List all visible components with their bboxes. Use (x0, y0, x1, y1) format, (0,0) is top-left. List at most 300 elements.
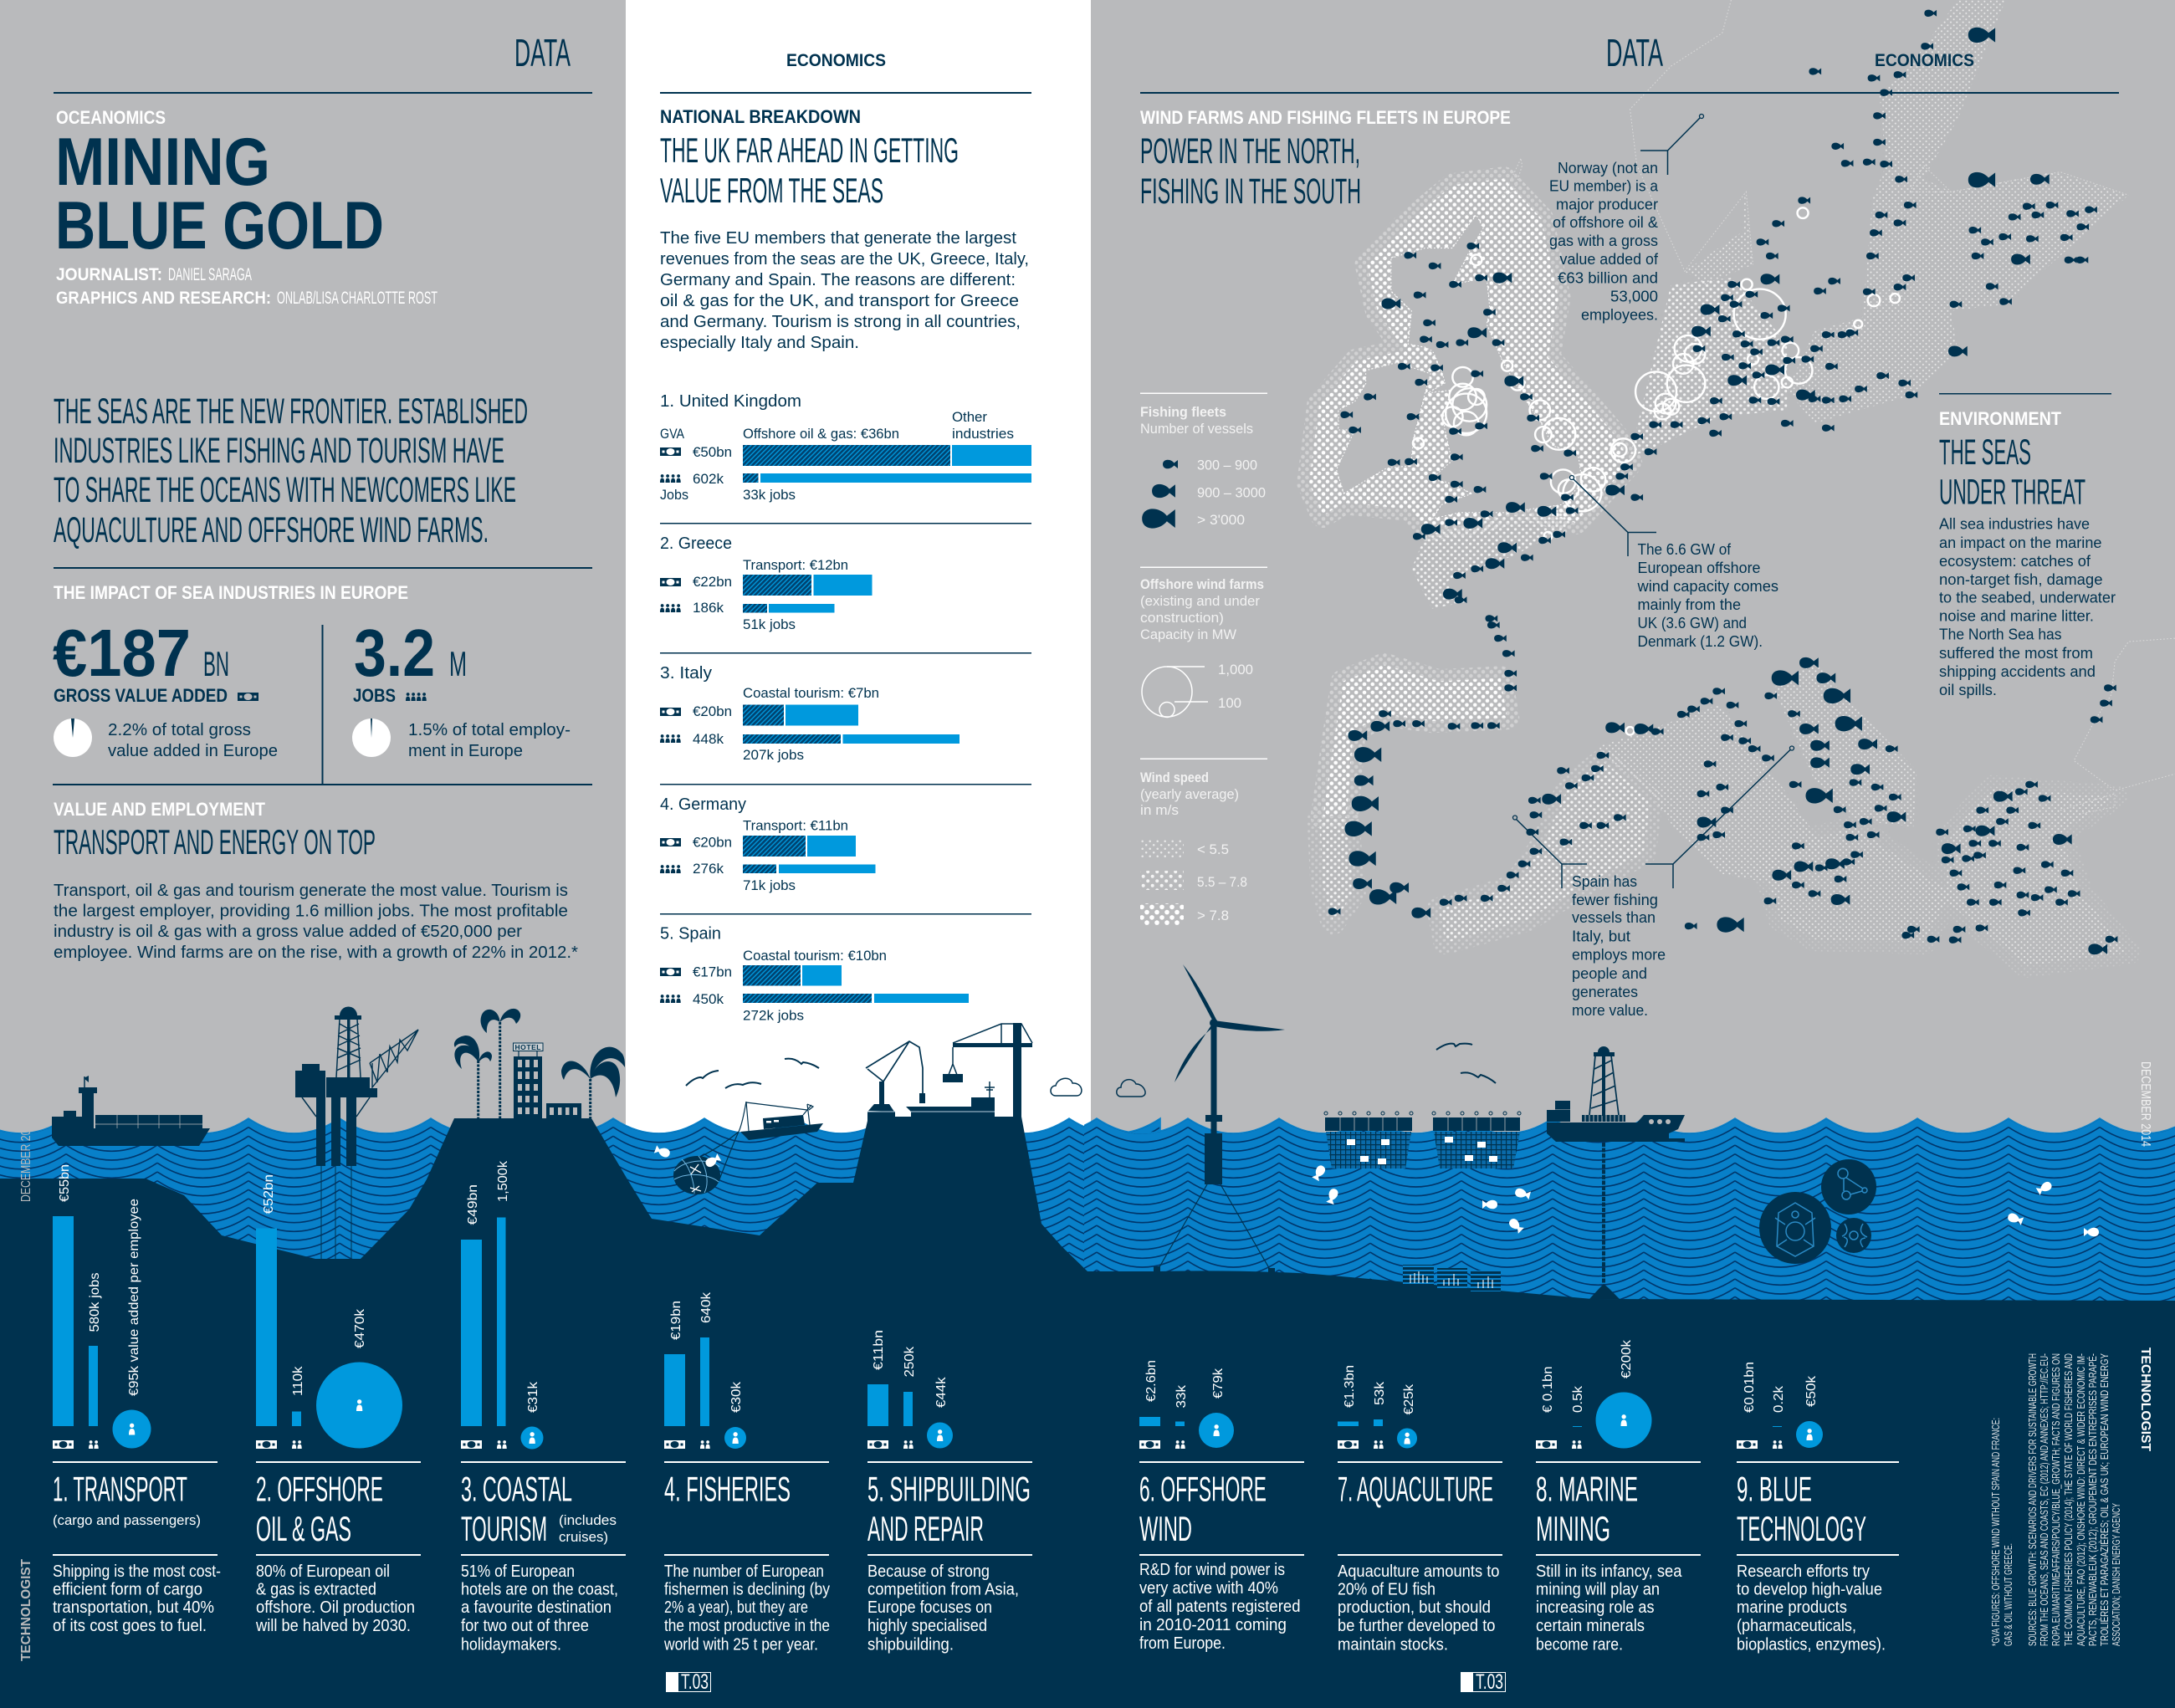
chart: Greece: 51k jobs (743, 616, 796, 632)
icon: seabed kelp boxes (1403, 1265, 1501, 1291)
text: offshore wind: in 2010-2011 coming (1139, 1616, 1287, 1634)
industry column 1: transport: (cargo and passengers) (53, 1512, 201, 1528)
industry column 7: aquaculture (1338, 1365, 1506, 1694)
legend: fishing fleets: 300 – 900 (1197, 458, 1257, 473)
intro body (660, 229, 1029, 352)
text: offshore wind (1139, 1561, 1300, 1653)
text: coastal tourism: a favourite destination (461, 1598, 612, 1617)
panel: right map text (1140, 31, 2119, 1019)
legend: wind speed: > 7.8 (1197, 908, 1229, 923)
panel: left intro column (53, 31, 592, 962)
chart: marine mining: € 0.1bn (1541, 1367, 1555, 1413)
chart: fisheries: €19bn (669, 1301, 683, 1340)
chart: marine mining: €200k (1620, 1339, 1634, 1378)
callout: Norway: Norway (not an (1558, 160, 1658, 176)
text: aquaculture: be further developed to (1338, 1617, 1496, 1635)
icon: shipyard crane (866, 1023, 1032, 1117)
icon: offshore wind turbine (1154, 964, 1285, 1275)
panel: environment: suffered the most from (1939, 645, 2093, 662)
legend: offshore wind farms (1140, 567, 1267, 718)
chart: blue technology: €50k (1804, 1375, 1819, 1407)
title: BLUE GOLD (55, 188, 384, 263)
chart: Greece: 2. Greece (660, 534, 732, 553)
text: shipbuilding: shipbuilding. (867, 1636, 954, 1654)
intro text: TO SHARE THE OCEANS WITH NEWCOMERS LIKE (54, 470, 516, 510)
text: offshore oil and gas: & gas is extracted (256, 1581, 376, 1599)
title: marine mining: MINING (1536, 1509, 1610, 1548)
chart: United Kingdom: 33k jobs (743, 487, 796, 503)
icon: birds over fishing boat (686, 1059, 819, 1088)
title: coastal tourism (461, 1469, 617, 1548)
chart: transport: €55bn (58, 1164, 72, 1202)
white centre panel (626, 0, 1091, 1154)
text: aquaculture: Aquaculture amounts to (1338, 1562, 1499, 1581)
text: offshore wind: from Europe. (1139, 1634, 1226, 1653)
chart: offshore oil and gas: 110k (291, 1365, 305, 1396)
callout: 6.6 GW: European offshore (1638, 560, 1760, 576)
heading: impact: THE IMPACT OF SEA INDUSTRIES IN EUROPE (54, 582, 408, 603)
icon: birds over fish farm (1436, 1044, 1496, 1083)
icon: blue technology cells (1759, 1159, 1876, 1264)
legend: offshore wind farms: Offshore wind farms (1140, 577, 1264, 592)
legend: offshore wind farms: (existing and under (1140, 594, 1261, 609)
page tag: T.03 (681, 1670, 709, 1694)
section label: data: DATA (1606, 31, 1663, 74)
text: shipbuilding: highly specialised (867, 1617, 987, 1635)
intro body: revenues from the seas are the UK, Greece, Italy, (660, 250, 1029, 268)
text: coastal tourism (461, 1562, 618, 1654)
panel: environment: shipping accidents and (1939, 663, 2096, 680)
country borders (1504, 0, 2175, 814)
chart: Spain: 272k jobs (743, 1007, 804, 1024)
text: shipbuilding: Europe focuses on (867, 1598, 992, 1617)
text: blue technology: Research efforts try (1737, 1562, 1870, 1581)
callout: Norway: gas with a gross (1549, 233, 1658, 249)
callout: Norway: €63 billion and (1558, 269, 1658, 286)
title: blue technology: 9. BLUE (1737, 1469, 1812, 1509)
body text: the largest employer, providing 1.6 million jobs. The most profitable (54, 902, 568, 920)
chart: offshore wind: €2.6bn (1144, 1360, 1159, 1402)
callout: Spain (1512, 746, 1794, 1019)
callout: Spain: people and (1572, 965, 1647, 982)
callout: Norway: EU member) is a (1549, 177, 1659, 194)
panel: environment: The North Sea has (1939, 626, 2061, 642)
chart: marine mining: 0.5k (1571, 1385, 1585, 1413)
panel: environment: ENVIRONMENT (1939, 408, 2062, 429)
legend: fishing fleets: 900 – 3000 (1197, 485, 1266, 500)
title: coastal tourism: (includes (559, 1512, 617, 1528)
chart: blue technology (1737, 1362, 1823, 1449)
callout: 6.6 GW: The 6.6 GW of (1638, 541, 1732, 558)
callout: Norway (1549, 114, 1703, 323)
side text: Technologist left: TECHNOLOGIST (19, 1559, 33, 1661)
industry column 1: transport (53, 1164, 221, 1635)
industry column 8: marine mining (1536, 1339, 1701, 1654)
legend: fishing fleets: > 3'000 (1197, 513, 1245, 528)
text: fisheries: the most productive in the (664, 1617, 830, 1635)
chart: aquaculture: 53k (1373, 1381, 1387, 1405)
text: fisheries: 2% a year), but they are (664, 1598, 808, 1617)
headline (660, 130, 959, 210)
chart: offshore oil and gas: €52bn (262, 1174, 276, 1215)
section label: economics: ECONOMICS (786, 51, 886, 70)
chart: Spain: Coastal tourism: €10bn (743, 948, 887, 964)
chart: Germany: 71k jobs (743, 877, 796, 893)
side text: Technologist right: TECHNOLOGIST (2138, 1347, 2152, 1451)
page tag (666, 1670, 711, 1694)
panel: environment: All sea industries have (1939, 515, 2090, 532)
title: aquaculture: 7. AQUACULTURE (1338, 1469, 1493, 1509)
chart: Germany (660, 795, 875, 893)
callout: 6.6 GW (1569, 475, 1778, 650)
chart: Germany: €20bn (693, 835, 732, 850)
icon: hotel and palms (454, 1009, 625, 1118)
intro text: THE SEAS ARE THE NEW FRONTIER. ESTABLISHED (54, 391, 528, 432)
chart: Greece: Transport: €12bn (743, 557, 848, 573)
industry column 4: fisheries (663, 1291, 830, 1694)
text: transport: of its cost goes to fuel. (53, 1617, 207, 1635)
industry column 6: offshore wind (1139, 1360, 1304, 1653)
headline: power in the north: FISHING IN THE SOUTH (1140, 171, 1361, 212)
chart: offshore oil and gas: €470k (353, 1308, 367, 1348)
stat: jobs: 3.2 (354, 616, 435, 690)
legend: fishing fleets (1140, 393, 1267, 529)
offshore wind farm circles (1413, 207, 1900, 735)
icon: hotel and palms: HOTEL (515, 1043, 540, 1051)
chart: aquaculture (1338, 1365, 1417, 1449)
title: coastal tourism: 3. COASTAL (461, 1469, 572, 1509)
legend: fishing fleets: Fishing fleets (1140, 405, 1226, 420)
chart: transport: €95k value added per employee (127, 1199, 141, 1396)
intro body: Germany and Spain. The reasons are different: (660, 271, 1016, 289)
text: fisheries: fishermen is declining (by (664, 1581, 830, 1599)
text: aquaculture: production, but should (1338, 1598, 1491, 1617)
intro text (54, 391, 528, 550)
icon: fish farm cages (1324, 1112, 1521, 1168)
credits (56, 265, 438, 308)
chart: United Kingdom: Offshore oil & gas: €36bn (743, 426, 899, 442)
panel: environment: THE SEAS (1939, 432, 2031, 473)
chart: offshore wind: 33k (1174, 1384, 1189, 1409)
title: transport: 1. TRANSPORT (53, 1469, 187, 1509)
footnotes and sources: ASSOCIATION; DANISH ENERGY AGENCY (2110, 1503, 2122, 1646)
text: transport: Shipping is the most cost- (53, 1562, 221, 1581)
chart: Italy: 3. Italy (660, 664, 712, 683)
chart: United Kingdom: industries (952, 426, 1014, 442)
text: offshore oil and gas: offshore. Oil production (256, 1598, 415, 1617)
title: offshore wind: 6. OFFSHORE (1139, 1469, 1267, 1509)
chart: United Kingdom: Jobs (660, 487, 688, 503)
intro body: The five EU members that generate the largest (660, 229, 1016, 248)
chart: Spain: 450k (693, 991, 724, 1007)
title: MINING (55, 125, 270, 200)
title: fisheries: 4. FISHERIES (664, 1469, 791, 1509)
title: shipbuilding: AND REPAIR (867, 1509, 984, 1548)
legend: wind speed (1140, 758, 1267, 925)
chart: Italy: €20bn (693, 703, 732, 719)
callout: Norway: employees. (1581, 306, 1658, 323)
text: fisheries: world with 25 t per year. (663, 1636, 818, 1654)
chart: Greece (660, 534, 872, 632)
text: shipbuilding: Because of strong (867, 1562, 990, 1581)
chart: United Kingdom (660, 392, 1031, 503)
chart: shipbuilding (867, 1330, 953, 1449)
kicker: oceanomics: OCEANOMICS (56, 107, 166, 128)
stat: jobs: M (449, 644, 467, 683)
callout: Spain: more value. (1572, 1002, 1648, 1019)
footnotes and sources: FROM THE OCEANS, SEAS AND COASTS, EC (2012) AND ANNEXES; HTTP://EC.EU- (2038, 1353, 2050, 1646)
text: fisheries (663, 1562, 830, 1654)
text: aquaculture: maintain stocks. (1338, 1636, 1448, 1654)
text: transport (53, 1562, 221, 1635)
chart: Germany: 4. Germany (660, 795, 746, 814)
callout: 6.6 GW: wind capacity comes (1636, 578, 1778, 595)
legend: offshore wind farms: 100 (1218, 696, 1241, 711)
footnotes and sources: ROPA.EU/MARITIMEAFFAIRS/POLICY/BLUE_GROWTH; FACTS AND FIGURES ON (2050, 1353, 2062, 1646)
panel: environment: noise and marine litter. (1939, 607, 2094, 624)
chart: coastal tourism: €49bn (466, 1184, 480, 1225)
panel: environment: non-target fish, damage (1939, 571, 2103, 588)
callout: Spain: Spain has (1572, 873, 1637, 890)
subheading: transport and energy: TRANSPORT AND ENERGY ON TOP (54, 822, 376, 862)
text: marine mining: increasing role as (1536, 1598, 1655, 1617)
footnotes and sources: SOURCES: BLUE GROWTH: SCENARIOS AND DRIVERS FOR SUSTAINABLE GROWTH (2026, 1353, 2039, 1646)
legend: wind speed: in m/s (1140, 803, 1179, 818)
headline: power in the north (1140, 131, 1361, 212)
chart: Italy: 207k jobs (743, 747, 804, 763)
sea with waves (0, 1117, 2175, 1301)
intro body: especially Italy and Spain. (660, 334, 859, 352)
stat: jobs: 1.5% of total employ- (408, 721, 571, 739)
text: coastal tourism: holidaymakers. (461, 1636, 561, 1654)
chart: fisheries (664, 1291, 746, 1449)
legend: wind speed: Wind speed (1140, 770, 1209, 785)
title: offshore wind (1139, 1469, 1267, 1548)
chart: Italy: 448k (693, 731, 724, 747)
panel: environment: an impact on the marine (1939, 534, 2101, 551)
section label: economics: ECONOMICS (1875, 51, 1974, 70)
footnotes and sources: PACTS, RENEWABLEUK (2012); GROUPEMENT DES ENTREPRISES PARAPÉ- (2086, 1353, 2099, 1646)
icon: fishing boat and net (673, 1102, 823, 1194)
chart: blue technology: €0.01bn (1743, 1362, 1757, 1413)
icon: white fish in sea (654, 1145, 2099, 1236)
industry column 2: offshore oil and gas (255, 1174, 421, 1635)
legend: wind speed: < 5.5 (1197, 842, 1229, 857)
text: fisheries: The number of European (664, 1562, 824, 1581)
callout: Spain: generates (1572, 984, 1638, 1000)
credits: GRAPHICS AND RESEARCH: (56, 289, 271, 308)
panel: environment: ecosystem: catches of (1939, 553, 2091, 570)
chart: United Kingdom: €50bn (693, 444, 732, 460)
text: aquaculture (1338, 1562, 1499, 1654)
side text: December 2014 right: DECEMBER 2014 (2138, 1061, 2152, 1147)
text: transport: transportation, but 40% (53, 1598, 214, 1617)
icon: container ship (52, 1076, 210, 1146)
chart: aquaculture: €1.3bn (1343, 1365, 1357, 1408)
footnotes and sources (1989, 1353, 2122, 1646)
credits: ONLAB/LISA CHARLOTTE ROST (277, 289, 438, 308)
title: offshore wind: WIND (1139, 1509, 1192, 1548)
text: marine mining (1536, 1562, 1682, 1654)
chart: United Kingdom: GVA (660, 426, 685, 442)
side text: December 2014 left: DECEMBER 2014 (19, 1118, 33, 1202)
chart: United Kingdom: Other (952, 409, 987, 425)
title: coastal tourism: TOURISM (461, 1509, 547, 1548)
title: blue technology: TECHNOLOGY (1737, 1509, 1866, 1548)
legend: offshore wind farms: 1,000 (1218, 662, 1253, 678)
stat: jobs: JOBS (353, 685, 396, 706)
legend: offshore wind farms: construction) (1140, 611, 1224, 626)
legend: fishing fleets: Number of vessels (1140, 422, 1253, 437)
text: offshore wind: R&D for wind power is (1139, 1561, 1285, 1579)
land: Britain and Ireland (1337, 215, 1582, 519)
text: coastal tourism: 51% of European (461, 1562, 575, 1581)
body text: industry is oil & gas with a gross value added of €520,000 per (54, 923, 522, 941)
stat: jobs (352, 616, 571, 760)
footnotes and sources: AQUACULTURE, FAO (2012); ONSHORE WIND: DIRECT & WIDER ECONOMIC IM- (2075, 1353, 2087, 1646)
panel: environment: oil spills. (1939, 682, 1997, 698)
headline: VALUE FROM THE SEAS (660, 171, 883, 210)
text: blue technology (1737, 1562, 1886, 1654)
callout: Norway: major producer (1556, 196, 1658, 212)
stat: gross value added: €187 (53, 616, 191, 690)
title: marine mining (1536, 1469, 1638, 1548)
stat: gross value added (53, 616, 278, 760)
chart: coastal tourism (461, 1160, 544, 1449)
chart: aquaculture: €25k (1402, 1383, 1416, 1415)
title: offshore oil and gas: 2. OFFSHORE (256, 1469, 383, 1509)
text: blue technology: bioplastics, enzymes). (1737, 1636, 1886, 1654)
chart: Greece: €22bn (693, 574, 732, 590)
callout: 6.6 GW: UK (3.6 GW) and (1638, 615, 1747, 632)
icon: research drilling ship (1547, 1046, 1685, 1299)
text: marine mining: Still in its infancy, sea (1536, 1562, 1682, 1581)
body text (54, 882, 578, 962)
text: coastal tourism: for two out of three (461, 1617, 589, 1635)
chart: shipbuilding: €11bn (872, 1330, 886, 1370)
credits: DANIEL SARAGA (168, 265, 252, 284)
body text: Transport, oil & gas and tourism generate the most value. Tourism is (54, 882, 568, 900)
panel: environment: to the seabed, underwater (1939, 589, 2116, 606)
legend: wind speed: 5.5 – 7.8 (1197, 875, 1247, 890)
title: blue technology (1737, 1469, 1866, 1548)
page tag (1461, 1670, 1506, 1694)
heading: wind farms and fishing fleets: WIND FARMS AND FISHING FLEETS IN EUROPE (1140, 107, 1511, 128)
fishing fleets: fish markers (1328, 10, 2117, 954)
stat: gross value added: value added in Europe (108, 742, 278, 760)
intro text: AQUACULTURE AND OFFSHORE WIND FARMS. (54, 510, 489, 550)
seabed and islands (0, 1112, 2175, 1708)
text: blue technology: (pharmaceuticals, (1737, 1617, 1856, 1635)
chart: offshore wind (1139, 1360, 1234, 1449)
text: transport: efficient form of cargo (53, 1581, 202, 1599)
legend: wind speed: (yearly average) (1140, 787, 1239, 802)
footnotes and sources: TROLIÈRES ET PARAGAZIÈRES; OIL & GAS UK; EUROPEAN WIND ENERGY (2098, 1353, 2111, 1646)
stat: jobs: ment in Europe (408, 742, 523, 760)
title: offshore oil and gas: OIL & GAS (256, 1509, 351, 1548)
text: marine mining: become rare. (1536, 1636, 1623, 1654)
chart: shipbuilding: €44k (934, 1376, 949, 1408)
stat: gross value added: BN (203, 644, 229, 683)
callout: Norway: value added of (1559, 251, 1659, 268)
intro body: oil & gas for the UK, and transport for Greece (660, 292, 1019, 310)
chart: Greece: 186k (693, 600, 724, 616)
section label: data: DATA (514, 31, 571, 74)
chart: Spain: €17bn (693, 964, 732, 980)
industry column 9: blue technology (1737, 1362, 1899, 1654)
chart: offshore wind: €79k (1211, 1368, 1226, 1399)
title: coastal tourism: cruises) (559, 1529, 608, 1545)
title: shipbuilding: 5. SHIPBUILDING (867, 1469, 1031, 1509)
footnotes and sources: THE COMMON FISHERIES POLICY (2014); THE STATE OF WORLD FISHERIES AND (2062, 1353, 2075, 1646)
text: offshore wind: very active with 40% (1139, 1579, 1278, 1598)
text: aquaculture: 20% of EU fish (1338, 1581, 1436, 1599)
stat: gross value added: 2.2% of total gross (108, 721, 251, 739)
callout: Norway: of offshore oil & (1553, 214, 1658, 231)
chart: fisheries: €30k (729, 1381, 744, 1413)
icon: oil rig (295, 1007, 418, 1259)
body text: employee. Wind farms are on the rise, with a growth of 22% in 2012.* (54, 943, 578, 962)
chart: coastal tourism: 1,500k (496, 1160, 510, 1202)
intro body: and Germany. Tourism is strong in all countries, (660, 313, 1021, 331)
callout: Norway: 53,000 (1610, 288, 1658, 304)
chart: blue technology: 0.2k (1772, 1385, 1786, 1413)
text: offshore oil and gas: 80% of European oil (256, 1562, 390, 1581)
chart: offshore oil and gas (256, 1174, 402, 1449)
text: marine mining: certain minerals (1536, 1617, 1645, 1635)
industry column 3: coastal tourism (461, 1160, 626, 1654)
page tag: T.03 (1476, 1670, 1503, 1694)
chart: Germany: Transport: €11bn (743, 818, 848, 833)
icon: clouds (1051, 1078, 1145, 1097)
footnotes and sources: *GVA FIGURES: OFFSHORE WIND WITHOUT SPAIN AND FRANCE: (1989, 1418, 2002, 1646)
illustrations above and below sea (52, 964, 2099, 1299)
chart: Germany: 276k (693, 861, 724, 877)
panel: national breakdown (660, 51, 1031, 1024)
callout: Spain: vessels than (1572, 909, 1656, 926)
chart: marine mining (1536, 1339, 1651, 1449)
callout: Spain: Italy, but (1572, 928, 1630, 945)
map: Europe wind speed and fishing fleets (1309, 0, 2175, 966)
text: offshore oil and gas (255, 1562, 415, 1635)
chart: shipbuilding: 250k (903, 1346, 917, 1377)
title (55, 125, 384, 263)
text: coastal tourism: hotels are on the coast, (461, 1581, 618, 1599)
chart: Spain: 5. Spain (660, 925, 721, 943)
callout: Spain: employs more (1572, 947, 1666, 964)
chart: United Kingdom: 602k (693, 471, 724, 487)
text: offshore oil and gas: will be halved by 2030. (255, 1617, 411, 1635)
text: shipbuilding (867, 1562, 1019, 1654)
chart: fisheries: 640k (699, 1291, 714, 1323)
chart: transport (53, 1164, 151, 1449)
panel: environment (1939, 393, 2116, 698)
legend: map (1140, 393, 1267, 925)
footnotes and sources: GAS & OIL WITHOUT GREECE. (2002, 1543, 2014, 1646)
heading: value and employment: VALUE AND EMPLOYMENT (54, 799, 265, 820)
legend: offshore wind farms: Capacity in MW (1140, 627, 1236, 642)
callout: Spain: fewer fishing (1572, 892, 1658, 908)
chart: United Kingdom: 1. United Kingdom (660, 392, 801, 411)
chart: coastal tourism: €31k (526, 1381, 540, 1413)
text: blue technology: marine products (1737, 1598, 1847, 1617)
title: shipbuilding (867, 1469, 1031, 1548)
headline: power in the north: POWER IN THE NORTH, (1140, 131, 1360, 171)
callout: 6.6 GW: Denmark (1.2 GW). (1638, 633, 1763, 650)
credits: JOURNALIST: (56, 265, 162, 284)
intro text: INDUSTRIES LIKE FISHING AND TOURISM HAVE (54, 431, 504, 471)
callout: 6.6 GW: mainly from the (1638, 596, 1741, 613)
